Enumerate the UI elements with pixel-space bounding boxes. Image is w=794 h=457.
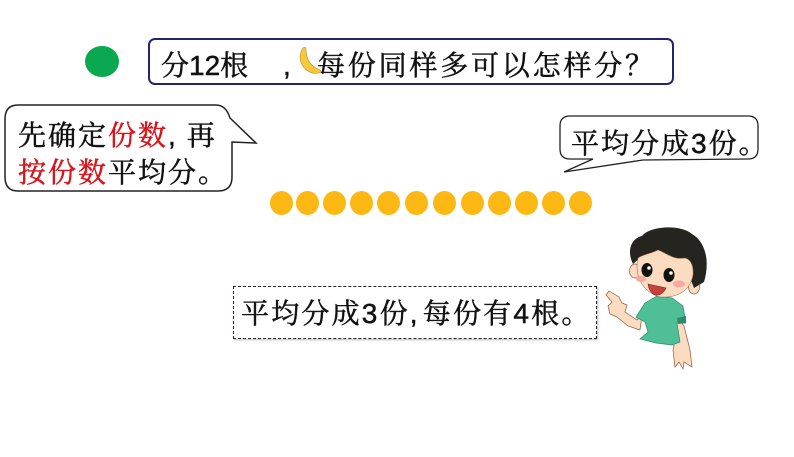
question text: comma: , [283,50,291,81]
question text: part two: 每份同样多可以怎样分？ [317,50,656,81]
left bubble line one: 先确定份数, 再 [18,120,217,151]
question text: part one: 分12根 [161,50,248,81]
answer text: 平均分成3份,每份有4根。 [241,298,592,329]
question box [148,38,674,85]
icon: banana [300,47,322,74]
left bubble line two: 按份数平均分。 [18,157,228,188]
dashed answer box [233,286,597,339]
icon: green circle [85,46,119,77]
right bubble text: 平均分成3份。 [571,128,769,159]
